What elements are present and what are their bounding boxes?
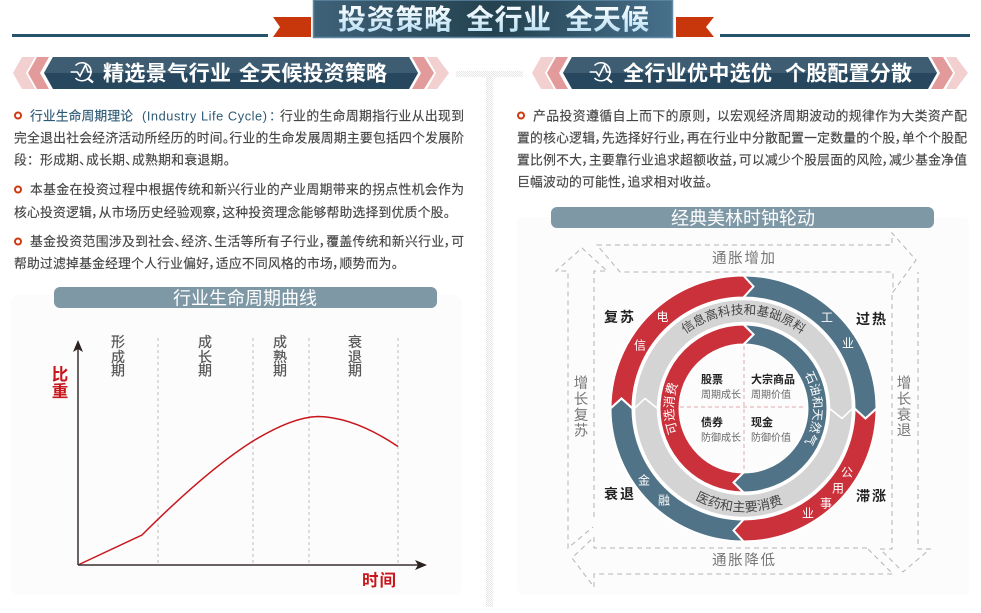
inner ring: [660, 324, 828, 492]
phase labels: 滞涨: [856, 488, 886, 504]
chart: lifecycle line: 重: [52, 382, 68, 401]
chart: lifecycle line: 形: [111, 334, 125, 350]
title text: [338, 4, 649, 35]
text block: left bullets: 行业的生命周期指行业从出现到: [280, 108, 464, 124]
dashed arrows frame: 衰: [897, 407, 911, 424]
dashed arrows frame: 长: [574, 391, 589, 408]
panel: lifecycle curve: [11, 287, 462, 595]
chart: lifecycle line: 期: [198, 362, 212, 378]
outer ring sector labels: 公: [841, 466, 853, 480]
dashed arrows frame: 增: [574, 375, 588, 392]
centre asset quadrants: 防御成长: [701, 431, 741, 444]
outer ring sector labels: 用: [832, 482, 844, 496]
dashed arrows frame: 增: [897, 375, 911, 392]
phase labels: 衰退: [604, 486, 634, 502]
banner: right heading: 个股配置分散: [785, 62, 912, 86]
chart: lifecycle line: 成: [111, 349, 125, 365]
title text: 投资策略: [338, 4, 452, 35]
phase labels: [604, 309, 886, 504]
dashed arrows frame: 通胀降低: [712, 552, 776, 569]
text block: left bullets: 本基金在投资过程中根据传统和新兴行业的产业周期带来的拐点性机会作为: [30, 182, 464, 197]
text block: right bullet: 巨幅波动的可能性，追求相对收益。: [517, 174, 712, 190]
centre asset quadrants: 周期成长: [701, 389, 741, 401]
ring arc labels: 医药和主要消费: [696, 490, 782, 513]
chart: lifecycle line: 退: [348, 349, 362, 365]
chart: lifecycle line: 熟: [273, 349, 287, 365]
heading text: 精选景气行业: [103, 62, 231, 86]
outer ring sector labels: 金: [638, 472, 650, 488]
chart: lifecycle line: [52, 334, 427, 590]
outer ring sector labels: [634, 310, 854, 520]
centre asset quadrants: 现金: [751, 415, 773, 429]
text block: right bullet: 置比例不大，主要靠行业追求超额收益，可以减少个股层面的风险，减少基金净值: [517, 152, 967, 168]
text block: left bullets: 帮助过滤掉基金经理个人行业偏好，适应不同风格的市场，顺势而为。: [14, 256, 398, 271]
dashed arrows frame: 苏: [574, 422, 588, 440]
icon: magnifier with trend line: [71, 63, 93, 82]
text block: left bullets: [14, 108, 464, 271]
centre asset quadrants: 防御价值: [751, 431, 791, 444]
banner: right heading: [532, 57, 968, 89]
centre asset quadrants: 大宗商品: [751, 372, 795, 386]
outer ring sector labels: 电: [656, 310, 669, 324]
panel heading pill: 经典美林时钟轮动: [671, 208, 815, 228]
outer ring sectors: [610, 276, 876, 542]
text block: left bullets: 核心投资逻辑，从市场历史经验观察，这种投资理念能够帮助选择到优质个股。: [14, 205, 450, 220]
outer ring sector labels: 融: [658, 494, 670, 508]
text block: right bullet: 产品投资遵循自上而下的原则: [533, 108, 705, 124]
phase labels: 过热: [856, 311, 886, 327]
chart: lifecycle line: 时间: [362, 571, 396, 590]
outer ring sector labels: 业: [802, 506, 814, 520]
chart: lifecycle line: 成: [273, 334, 287, 350]
text block: left bullets: 段: [14, 152, 27, 168]
text block: right bullet: ，: [706, 108, 712, 124]
phase labels: 复苏: [604, 309, 634, 325]
text block: left bullets: 行业生命周期理论: [30, 108, 133, 124]
ring arc labels: [663, 304, 824, 513]
outer ring sector labels: 业: [842, 336, 854, 350]
left red ribbon: [273, 17, 311, 37]
dashed arrows frame: 复: [574, 406, 588, 424]
banner: left heading: [13, 57, 449, 89]
dashed arrows frame: [556, 233, 930, 587]
chart: lifecycle line: 长: [198, 349, 212, 365]
icon: magnifier with trend line: [590, 63, 612, 82]
text block: left bullets: 形成期、成长期、成熟期和衰退期。: [40, 152, 230, 168]
panel: Merrill clock: [551, 207, 934, 587]
panel heading pill: [551, 207, 934, 228]
centre asset quadrants: 周期价值: [751, 388, 791, 401]
chart: lifecycle line: 期: [273, 362, 287, 378]
text block: right bullet: 以宏观经济周期波动的规律作为大类资产配: [717, 108, 967, 124]
central dotted divider: [456, 71, 523, 607]
centre asset quadrants: [680, 346, 806, 472]
middle grey ring: [634, 299, 852, 518]
text block: left bullets: ：: [27, 152, 33, 168]
text block: right bullet: [517, 108, 967, 190]
panel heading pill: [54, 287, 437, 308]
text block: right bullet: 置的核心逻辑，先选择好行业，再在行业中分散配置一定数量的个股，单个个股配: [517, 130, 967, 146]
dashed arrows frame: 长: [897, 391, 912, 408]
dashed arrows frame: 通胀增加: [712, 250, 775, 267]
panel heading pill: 行业生命周期曲线: [173, 288, 317, 308]
ring arc labels: 信息高科技和基础原料: [682, 304, 806, 334]
outer ring sector labels: 信: [634, 338, 646, 352]
title text: 全天候: [565, 4, 649, 35]
centre asset quadrants: 股票: [701, 373, 723, 386]
chart: lifecycle line: 期: [348, 362, 362, 378]
title box: [314, 0, 672, 38]
chart: lifecycle line: 比: [52, 365, 68, 384]
heading text: 全行业优中选优: [623, 62, 772, 86]
text block: left bullets: 完全退出社会经济活动所经历的时间。行业的生命发展周期主要包括四个发展阶: [14, 130, 464, 146]
ring arc labels: 石油和天然气: [804, 370, 824, 446]
text block: left bullets: (Industry Life Cycle): [142, 108, 267, 124]
outer ring sector labels: 事: [820, 496, 832, 510]
chart: lifecycle line: 成: [198, 334, 212, 350]
ring arc labels: 可选消费: [663, 382, 678, 435]
dashed arrows frame: 退: [897, 422, 911, 440]
chart: lifecycle line: 衰: [348, 334, 362, 350]
right red ribbon: [676, 17, 714, 37]
text block: left bullets: 基金投资范围涉及到社会、经济、生活等所有子行业，覆盖传统和新兴行业，可: [30, 234, 464, 249]
chart: lifecycle line: 期: [111, 362, 125, 378]
outer ring sector labels: 工: [821, 310, 833, 324]
header: main title band: [12, 0, 970, 38]
title text: 全行业: [466, 4, 551, 35]
text block: left bullets: ：: [269, 108, 275, 124]
centre asset quadrants: 债券: [701, 415, 723, 429]
banner: left heading: 全天候投资策略: [239, 62, 387, 86]
